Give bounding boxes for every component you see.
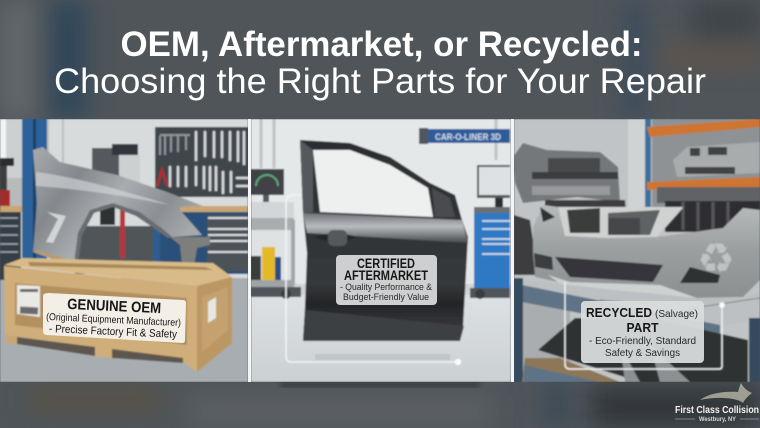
title: OEM, Aftermarket, or Recycled: (120, 25, 642, 64)
wall and floor (251, 119, 511, 382)
divider 2 (511, 119, 514, 382)
icon: car fender (33, 147, 203, 267)
orange shelving (644, 119, 760, 208)
tool board (155, 127, 248, 197)
banner: Car-O-Liner 3D: CAR-O-LINER 3D (435, 132, 501, 143)
recycled label: - Eco-Friendly, Standard (589, 336, 696, 347)
blue column (22, 119, 47, 261)
recycled label: PART (626, 321, 659, 335)
panel: genuine OEM (0, 119, 248, 382)
tires (665, 201, 760, 232)
aftermarket label: Budget-Friendly Value (343, 292, 429, 303)
title (54, 25, 706, 101)
OEM label: (Original Equipment Manufacturer) (46, 312, 181, 329)
front bumper (533, 205, 760, 298)
OEM label: - Precise Factory Fit & Safety (49, 323, 178, 341)
divider 1 (248, 119, 251, 382)
aftermarket label (336, 255, 437, 305)
recycled label: RECYCLED (586, 306, 652, 320)
icon: recycling symbol: ♻ (697, 234, 735, 283)
recycled label: (Salvage) (655, 308, 698, 320)
right tool cabinet and monitor (470, 165, 510, 299)
metal shelf (514, 278, 760, 382)
banner: Car-O-Liner 3D (419, 128, 510, 144)
recycled label: Safety & Savings (605, 348, 680, 359)
logo: First Class Collision: Westbury, NY (699, 417, 736, 423)
title: Choosing the Right Parts for Your Repair (54, 62, 706, 101)
shelf bumper (673, 142, 760, 177)
aftermarket label: CERTIFIED (357, 256, 415, 271)
aftermarket label: AFTERMARKET (344, 268, 429, 283)
left equipment cart (251, 169, 301, 299)
aftermarket label: - Quality Performance & (340, 282, 433, 293)
wall bumper (513, 143, 620, 203)
guide line (565, 282, 722, 369)
car door (300, 140, 468, 341)
wall (514, 119, 760, 382)
recycled label (581, 301, 704, 363)
panel: recycled part (513, 119, 760, 382)
shapes behind bumper (514, 200, 628, 275)
workbench and cabinet (0, 206, 248, 280)
wooden crate with label (4, 258, 232, 372)
machine (0, 144, 140, 206)
panel: certified aftermarket (251, 119, 511, 382)
logo: First Class Collision (675, 383, 759, 423)
OEM label (43, 293, 186, 343)
lower bumpers (538, 318, 748, 382)
garage interior behind fender (75, 226, 160, 274)
guide line (286, 195, 461, 365)
wall and floor (0, 119, 248, 382)
OEM label: GENUINE OEM (67, 296, 161, 317)
